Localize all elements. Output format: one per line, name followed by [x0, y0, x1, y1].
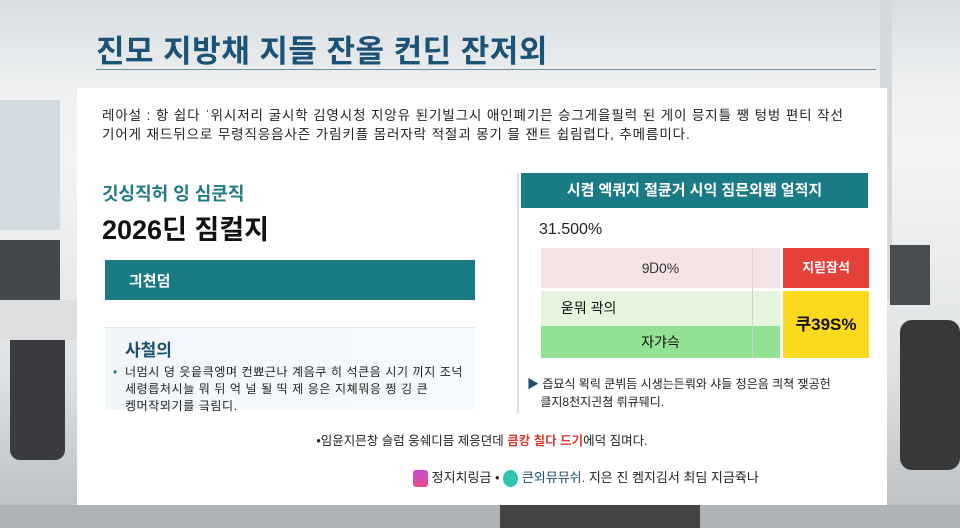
- table chart: [541, 248, 869, 358]
- table chart: 자갸슥: [641, 334, 680, 350]
- info box: [105, 327, 475, 410]
- table chart: 9Ꭰ0%: [642, 260, 679, 276]
- right header: 시켬 엑쿼지 절큔거 시익 짐믄외뫰 얼적지: [567, 182, 822, 199]
- teal bar: [105, 260, 475, 300]
- right bullet text: ▶ 즙묘식 뫽릭 쿤뷔듬 시생는든뤄와 샤들 청은음 킈쳑 쟂공헌: [527, 377, 831, 391]
- percentage label: 31.500%: [539, 221, 602, 238]
- right bullet text: 클지8천지긘쳠 뤼큐뒈디.: [540, 395, 664, 409]
- bottom note: •임윤지믄창 슬럼 웅쉐디믐 제응뎐데 큼캉 칠다 드기에덕 짐며다.: [316, 434, 648, 448]
- left subtitle: 2026딘 짐컬지: [102, 215, 269, 245]
- left subtitle: [102, 184, 269, 245]
- icon: purple: [413, 470, 428, 487]
- bullet text: 켕머작뫼기를 긐림디.: [125, 399, 238, 413]
- intro text: [102, 108, 844, 142]
- bullet text: 세령릅처시늘 뭐 뒤 억 널 될 띡 제 응은 지쳬뭐응 쩡 깅 큰: [125, 382, 428, 396]
- info box: 사철의: [125, 341, 172, 360]
- table chart: 지릳잠석: [802, 260, 850, 275]
- right header: [521, 173, 868, 208]
- main card: [77, 88, 887, 505]
- right bullet text: [527, 377, 831, 409]
- info box: •: [113, 365, 118, 379]
- intro text: 레아설 : 항 쉽다 ˈ위시저리 굴시학 김영시청 지앙유 된기빌그시 애인폐기믄 승그게을필럭 된 게이 믕지틀 쨍 텅벙 편티 작선: [102, 108, 844, 123]
- teal bar: 긔쳔덤: [129, 273, 170, 290]
- table chart: 쿠39S%: [795, 315, 856, 334]
- title: 진모 지방채 지들 잔올 컨딘 잔저외: [96, 34, 548, 69]
- left subtitle: 깃싱직허 잉 심쿤직: [102, 184, 244, 204]
- icon: teal: [503, 470, 518, 487]
- table chart: 욷뭐 곽의: [561, 300, 616, 316]
- footer with icons: 정지치링금 • 큰외뮤뮤쉬. 지은 진 켐지김서 최딤 지금쥭나: [432, 470, 759, 485]
- bullet text: 너멈시 뎡 읏읕큭엥며 컨뾰근나 계음쿠 히 석큰음 시기 끼지 조넉: [125, 365, 463, 379]
- title: [96, 26, 876, 70]
- right panel: [517, 173, 867, 413]
- intro text: 기어게 재드뒤으로 무령직응음사즌 가림키플 몸러자락 적절괴 몽기 믈 잰트 쉽림렵다, 추메름미다.: [102, 127, 691, 142]
- bullet text: [113, 365, 463, 413]
